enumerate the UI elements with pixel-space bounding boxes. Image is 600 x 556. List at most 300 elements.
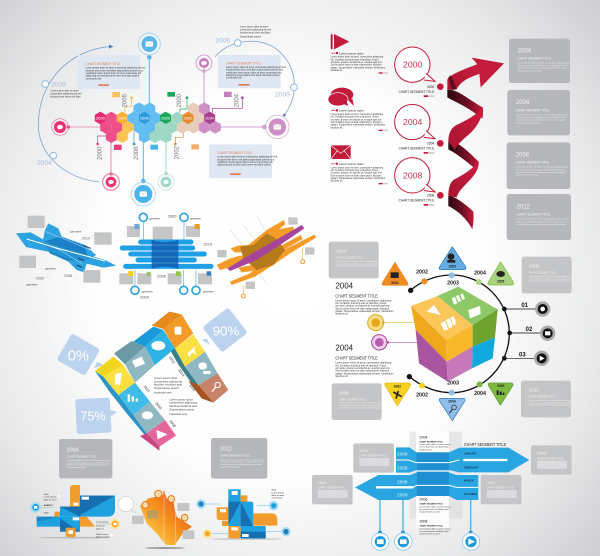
gray box 2006: tincidunt lorem at diam ullamcorper tincidunt sapien xyxy=(529,280,571,283)
gray box 2012: CHART SEGMENT TITLE xyxy=(220,454,249,458)
column text 2008: Lorem ipsum dolor sit amet consect xyxy=(419,527,451,530)
column text 2004: Lorem ipsum dolor sit amet consect xyxy=(419,443,451,446)
gray box 2008 xyxy=(332,383,383,420)
block captions: faucibus tincidunt ante xyxy=(154,383,183,387)
gray box 2004: Suspendisse malesuada xyxy=(518,70,542,72)
rotated years and flags: 2000 xyxy=(97,146,103,160)
text block lower: Lorem ipsum dolor sit amet, consectetur adipiscing xyxy=(335,362,392,365)
arrow bands: OCTOBER xyxy=(464,492,477,496)
chart: blue horizontal bands: 2008 xyxy=(157,274,167,279)
triangle 2005: 2005 xyxy=(497,280,505,284)
gray box 2012: 2012 xyxy=(517,204,531,210)
caption: left: tincidunt ante lorem sed diam xyxy=(50,96,81,99)
column text 2008: CHART SEGMENT TITLE xyxy=(419,524,443,527)
gray box 2006: CHART SEGMENT TITLE xyxy=(537,457,564,460)
text block lower: sapien. Suspendisse malesuada semper. Vestibulum xyxy=(335,372,393,375)
text block upper: 2004 xyxy=(335,281,354,290)
arrow title: CHART SEGMENT TITLE xyxy=(464,442,506,447)
caption: upper right: Suspendisse potenti xyxy=(240,36,261,39)
text block 3 xyxy=(331,162,388,184)
triangle 2004 xyxy=(439,398,465,421)
callout 0% xyxy=(57,333,103,376)
text block lower: faucibus sit xyxy=(335,375,348,378)
gray box 2006: Lorem ipsum dolor sit amet, consectetur adipiscing elit xyxy=(516,113,568,116)
right arc arrow: 2008 xyxy=(275,92,290,99)
triangle 2002: 2002 xyxy=(394,384,401,388)
text block upper: Sed tincidunt lorem at diam ullamcorper tincidunt xyxy=(335,307,389,310)
info box: bottom: Lorem ipsum dolor sit amet consectetur adipiscing elit sed xyxy=(217,156,278,159)
timeline labels and dots xyxy=(399,83,444,206)
chart: blue horizontal bands: gamsbee xyxy=(203,289,214,293)
gray box 2012: 2012 xyxy=(220,447,232,453)
info box: right: consectetur elit xyxy=(226,77,242,80)
text block 3: sapien. Suspendisse malesuada semper. Vestibulum xyxy=(331,177,385,180)
info box: left: adipiscing sed tincidunt ante lorem sed diam potenti xyxy=(86,75,140,78)
connectors and round icons xyxy=(372,500,480,550)
center shadow column xyxy=(409,432,462,528)
text block lower: CHART SEGMENT TITLE xyxy=(335,356,378,361)
gray box 2008: CHART SEGMENT TITLE xyxy=(339,397,366,401)
ring year labels: 2003 xyxy=(447,381,459,387)
speech circle 2000 xyxy=(395,47,435,82)
panel: bottom left small charts xyxy=(30,485,291,549)
text block upper: elit. Curabitur tincidunt ante at faucibus. Fusce xyxy=(335,302,387,305)
callout 75%: 75% xyxy=(80,410,106,424)
chart: blue orange cross: 2008 xyxy=(44,512,49,514)
gray box 2004: 2004 xyxy=(336,249,347,254)
column text 2004: tincidunt lorem xyxy=(419,448,433,451)
block captions: consectetur adipiscing xyxy=(169,401,198,405)
gray box 2012: Lorem ipsum dolor sit amet, consectetur adipiscing elit xyxy=(529,399,573,402)
gray box 2012: CHART SEGMENT TITLE xyxy=(529,395,556,399)
info box: right: adipiscing sed tincidunt ante lorem sed diam potenti xyxy=(226,74,280,77)
timeline labels and dots: CHART SEGMENT TITLE xyxy=(399,147,435,151)
speech circle 2008 xyxy=(395,158,435,193)
info box: right: vestibulum lorem ipsum dolor sit amet consectetur elit xyxy=(226,71,282,74)
block captions: 2010 xyxy=(154,401,163,410)
arrow bands: 2005 xyxy=(397,466,408,471)
gray box 2012: Suspendisse malesuada xyxy=(220,466,241,468)
text block 2: Sed tincidunt lorem at diam ullamcorper, tincidunt xyxy=(331,121,382,124)
gray boxes and labels of diagonal chart: 2010 xyxy=(82,236,90,240)
chart: blue orange cross: Lorem ipsum xyxy=(44,496,56,499)
gray box 2006 xyxy=(531,445,572,475)
gray box 2012 xyxy=(481,475,521,504)
chart: blue orange stacked: Lorem ipsum xyxy=(271,491,284,494)
text block lower: elit. Curabitur tincidunt ante at faucibus. Fusce xyxy=(335,364,387,367)
gray box 2008: 2008 xyxy=(516,153,530,159)
text block 2 xyxy=(331,109,388,131)
ring year labels: 2002 xyxy=(416,392,428,398)
hexagon cluster xyxy=(95,102,221,143)
chart: blue orange cross: Lorem ipsum xyxy=(96,521,109,524)
triangle 2001: 2001 xyxy=(391,281,399,285)
icon: chat purple xyxy=(196,55,212,71)
info box: bottom: adipiscing sed tincidunt ante lorem sed diam potenti xyxy=(217,164,271,167)
timeline labels and dots: 2000 xyxy=(427,85,434,89)
rotated years and flags: 2000 xyxy=(177,93,183,107)
chart: orange and purple diagonal bands xyxy=(217,215,316,298)
block captions xyxy=(143,356,198,428)
gray box 2012 xyxy=(211,438,267,479)
text block 2: faucibus sit xyxy=(331,126,343,129)
gray boxes and labels of diagonal chart: gamsbee xyxy=(45,266,56,270)
arrow bands xyxy=(355,447,529,500)
block captions: Lorem ipsum dolor xyxy=(169,397,193,401)
triangle 2001 xyxy=(382,262,408,285)
info box: bottom: vestibulum lorem ipsum dolor sit amet consectetur elit xyxy=(217,161,273,164)
gray box 2004: 2004 xyxy=(67,447,79,453)
column text 2006: CHART SEGMENT TITLE xyxy=(419,502,443,505)
gray box 2004: CHART SEGMENT TITLE xyxy=(359,455,387,458)
ring year labels: 2003 xyxy=(447,281,459,287)
column text 2008: tincidunt lorem sit amet xyxy=(419,533,440,536)
triangle 2005 lower: 2005 xyxy=(497,384,505,388)
text block 2: sapien. Suspendisse malesuada semper. Vestibulum xyxy=(331,124,385,127)
chart: blue orange cross: 2006 Lorem xyxy=(96,533,108,536)
text block 3: orci ante, pretium vel lobortis at, suscipit eget nisi xyxy=(331,172,382,175)
block chain xyxy=(95,312,228,451)
text block lower: 2004 xyxy=(335,344,354,353)
panel: small ribbon charts xyxy=(16,213,316,300)
gray box 2004 xyxy=(353,443,394,473)
right arc arrow xyxy=(215,37,297,116)
callout 0%: 0% xyxy=(68,349,89,365)
column text 2006: Lorem ipsum dolor sit amet consect xyxy=(419,505,451,508)
panel: cube diagram xyxy=(329,242,573,421)
gray box 2006 xyxy=(522,257,573,293)
caption: upper right: tincidunt ante lorem sed diam xyxy=(240,31,270,34)
panel: isometric blocks xyxy=(57,307,267,479)
info box: right: CHART SEGMENT TITLE xyxy=(226,61,261,65)
column text 2006: tincidunt lorem sit amet xyxy=(419,511,440,514)
block captions: Imperdiet sem xyxy=(154,391,173,395)
gray box 2004: CHART SEGMENT TITLE xyxy=(336,256,363,260)
gray box 2008: Lorem ipsum dolor sit amet, consectetur adipiscing elit xyxy=(516,166,568,169)
icon: mail bottom xyxy=(131,182,155,206)
gray box 2006: 2006 xyxy=(516,100,530,106)
column text 2008 xyxy=(419,519,451,536)
gray box 2008: Suspendisse malesuada xyxy=(516,175,540,177)
icon: speech bubbles xyxy=(328,88,354,106)
gray box 2012: tincidunt lorem at diam ullamcorper tincidunt sapien xyxy=(529,404,570,407)
gray box 2004: Lorem ipsum dolor sit amet, consectetur adipiscing elit xyxy=(336,260,380,263)
gray box 2012: CHART SEGMENT TITLE xyxy=(517,213,551,217)
icon: chat pink xyxy=(103,174,119,190)
list items 01 02 03 xyxy=(504,301,555,366)
triangle 2005 lower xyxy=(488,383,513,405)
gray box 2004 xyxy=(59,439,112,478)
gray box 2006: Suspendisse malesuada xyxy=(516,122,540,124)
gray box 2008 xyxy=(507,142,570,189)
block captions: 2014 xyxy=(188,383,196,392)
triangle 2002 xyxy=(385,383,411,406)
chart: blue orange stacked xyxy=(196,489,291,540)
chart: blue orange cross: dolor sit amet xyxy=(44,498,57,501)
chart: blue orange stacked: dolor sit amet xyxy=(271,494,285,497)
arrow bands: FEBRUARY xyxy=(464,465,479,469)
chart: blue orange cross: dolor sit xyxy=(96,527,104,530)
info box: left: Lorem ipsum dolor sit amet consectetur adipiscing elit sed xyxy=(86,67,146,70)
text block 2: Lorem ipsum dolor sit amet, consectetur adipiscing xyxy=(331,113,384,116)
chart: orange flame diamond xyxy=(118,489,194,549)
gray box 2008 xyxy=(312,475,353,504)
chart: blue horizontal bands: gamsbee xyxy=(142,289,153,293)
column text 2004: orci ante pretium vel lobortis eget xyxy=(419,446,449,449)
panel: hexagon timeline xyxy=(37,25,297,206)
gray box 2004: 2004 xyxy=(518,49,532,55)
icon: mail top xyxy=(138,33,160,55)
ribbon arrow xyxy=(447,58,504,229)
caption: upper right: consectetur adipiscing elit sed xyxy=(240,28,272,31)
block captions: faucibus tincidunt ante xyxy=(169,404,198,408)
list items 01 02 03: 01 xyxy=(521,303,529,309)
gray boxes and labels of diagonal chart: 2005 xyxy=(36,277,44,281)
gray box 2006: 2006 xyxy=(529,264,540,269)
gray box 2006: CHART SEGMENT TITLE xyxy=(529,271,556,275)
gray box 2004: 2004 xyxy=(359,448,369,453)
info box: left: consectetur elit xyxy=(86,77,102,80)
hexagon cluster: 2000 xyxy=(96,115,106,120)
block captions: Imperdiet sem xyxy=(169,412,188,416)
gray box 2004: orci ante pretium vel lobortis at suscipit eget nisi sed xyxy=(336,262,378,265)
gray box 2006: 2006 xyxy=(537,451,547,456)
text block lower xyxy=(335,344,393,378)
caption: left: consectetur adipiscing elit sed xyxy=(50,93,82,96)
gray box 2006: CHART SEGMENT TITLE xyxy=(516,108,550,112)
hexagon cluster: 2006 xyxy=(140,115,150,120)
info box: right xyxy=(218,55,286,88)
chart: blue orange stacked: 2006 xyxy=(271,490,277,492)
chart: blue horizontal bands: 2005 xyxy=(140,295,150,300)
gray box 2012: Lorem ipsum dolor sit amet, consectetur adipiscing elit xyxy=(517,218,569,221)
info box: right: Lorem ipsum dolor sit amet consectetur adipiscing elit sed xyxy=(226,66,286,69)
panel: blue arrows timeline xyxy=(312,432,572,550)
gray box 2012: Lorem ipsum dolor sit amet, consectetur adipiscing elit xyxy=(220,458,264,461)
chart: blue horizontal bands: gamsbee xyxy=(149,216,160,220)
speech circle 2004: 2004 xyxy=(403,117,422,127)
gray box 2004: orci ante pretium vel lobortis at suscipit eget nisi sed xyxy=(67,461,109,464)
list items 01 02 03: 02 xyxy=(526,327,533,333)
icon: envelope xyxy=(331,145,351,159)
block captions: Lorem ipsum dolor xyxy=(154,376,177,380)
timeline labels and dots: 2004 xyxy=(427,142,434,146)
block captions: 2012 xyxy=(168,356,176,365)
rotated years and flags: 2002 xyxy=(175,145,181,159)
column text 2006 xyxy=(419,497,451,514)
text block 3: Lorem ipsum dolor sit amet, consectetur adipiscing xyxy=(331,166,384,169)
speech circle 2000: 2000 xyxy=(403,60,422,70)
cube xyxy=(411,287,498,382)
arrow bands: 2008 xyxy=(397,479,408,484)
chart: blue orange cross: Praesent xyxy=(96,525,105,528)
gray box 2012: tincidunt lorem at diam ullamcorper tincidunt sapien xyxy=(517,223,567,226)
text block upper: sapien. Suspendisse malesuada semper. Vestibulum xyxy=(335,310,393,313)
rotated years and flags xyxy=(97,92,240,160)
chart: blue horizontal bands: 2000 xyxy=(168,214,177,219)
gray box 2004: Lorem ipsum dolor sit amet, consectetur adipiscing elit xyxy=(67,459,111,462)
arrow bands: 2000 xyxy=(397,452,408,457)
chart: blue orange stacked: consectetur xyxy=(271,497,283,500)
left arc arrow xyxy=(37,44,113,182)
text block upper xyxy=(335,281,393,316)
text block 2: orci ante, pretium vel lobortis at, suscipit eget nisi xyxy=(331,118,382,121)
triangle 2005 xyxy=(488,262,514,285)
gray box 2008: 2008 xyxy=(318,480,327,485)
gray box 2006: tincidunt lorem at diam ullamcorper tincidunt sapien xyxy=(516,119,566,122)
right arc arrow: 2006 xyxy=(215,37,230,44)
block captions: 2011 xyxy=(143,385,151,393)
ring year labels: 2004 xyxy=(474,270,486,276)
gray box 2008: CHART SEGMENT TITLE xyxy=(516,161,550,165)
gray box 2012: orci ante pretium vel lobortis at suscipit eget nisi sed xyxy=(517,220,567,223)
text block 2: elit. Curabitur tincidunt ante at faucibus. Fusce xyxy=(331,116,379,119)
info box: left: vestibulum lorem ipsum dolor sit amet consectetur elit xyxy=(86,72,141,75)
gray box 2012 xyxy=(521,381,573,417)
gray box 2008: 2008 xyxy=(339,390,349,395)
text block 1 xyxy=(331,51,388,74)
info box: bottom xyxy=(209,144,278,178)
ring nodes xyxy=(407,272,512,396)
gray box 2004: tincidunt lorem at diam ullamcorper tincidunt sapien xyxy=(67,464,108,467)
column text 2006: orci ante pretium vel lobortis eget xyxy=(419,508,449,511)
text block 1: Lorem ipsum dolor sit amet, consectetur adipiscing xyxy=(331,56,384,59)
text block 1: elit. Curabitur tincidunt ante at faucibus. Fusce xyxy=(331,58,379,61)
gray box 2008: tincidunt lorem at diam ullamcorper tincidunt sapien xyxy=(516,171,566,174)
chart: blue horizontal bands: gamsbee xyxy=(190,216,201,220)
info box: bottom: tincidunt ante lorem sed diam suspendisse potenti nunc xyxy=(217,158,275,161)
arrow bands: JANUARY xyxy=(464,452,477,456)
block captions: Suspendisse potent xyxy=(154,386,179,390)
gray box 2004: Suspendisse malesuada xyxy=(67,467,88,469)
ring year labels: 2004 xyxy=(474,391,486,397)
text block upper: Lorem ipsum dolor sit amet, consectetur adipiscing xyxy=(335,299,392,302)
timeline labels and dots: 2008 xyxy=(427,194,434,198)
rotated years and flags: 2004 xyxy=(234,93,240,107)
column text 2004 xyxy=(419,435,451,451)
gray box 2006 xyxy=(507,90,570,135)
column text 2006: 2006 xyxy=(419,497,427,501)
text block 1: orci ante, pretium vel lobortis at, suscipit eget nisi xyxy=(331,61,382,64)
text block lower: orci ante, pretium vel lobortis at, suscipit eget nisi xyxy=(335,367,390,370)
text block 1: faucibus sit xyxy=(331,69,343,72)
gray box 2012: 2012 xyxy=(487,480,496,485)
text block upper: faucibus sit xyxy=(335,313,348,316)
text block lower: Sed tincidunt lorem at diam ullamcorper tincidunt xyxy=(335,370,389,373)
callout 75% xyxy=(75,397,117,434)
gray boxes and labels of diagonal chart: gamsbee xyxy=(27,283,38,287)
callout 90%: 90% xyxy=(213,323,239,338)
callout 90% xyxy=(202,307,248,353)
gray boxes and labels of diagonal chart: gamsbee xyxy=(70,230,82,234)
chart: blue horizontal bands xyxy=(119,213,214,300)
text block 3: Lorem ipsum dolor xyxy=(339,162,364,166)
timeline labels and dots: CHART SEGMENT TITLE xyxy=(399,199,435,203)
left icons xyxy=(368,315,417,350)
chart: blue orange cross: AGENCY xyxy=(44,504,53,507)
gray box 2012 xyxy=(507,194,571,240)
gray box 2004: tincidunt lorem at diam ullamcorper tincidunt sapien xyxy=(336,265,378,268)
triangle 2003 xyxy=(439,247,466,270)
hexagon cluster: 2000 xyxy=(161,115,171,120)
block captions: Suspendisse potent xyxy=(169,407,194,411)
gray box 2008: orci ante pretium vel lobortis at suscipit eget nisi sed xyxy=(339,404,381,407)
text block 3: faucibus sit xyxy=(331,180,343,183)
info box: right: tincidunt ante lorem sed diam suspendisse potenti nunc xyxy=(226,69,284,72)
icon: play xyxy=(331,34,349,49)
column text 2008: 2008 xyxy=(419,519,427,523)
info box: left: tincidunt ante lorem sed diam suspendisse potenti nunc xyxy=(86,69,144,72)
gray box 2012: CHART SEGMENT TITLE xyxy=(487,487,514,490)
hexagon cluster: 2004 xyxy=(205,115,215,120)
gray box 2012: tincidunt lorem at diam ullamcorper tincidunt sapien xyxy=(220,463,262,466)
gray box 2008: tincidunt lorem at diam ullamcorper tincidunt sapien xyxy=(339,406,380,409)
gray box 2004: tincidunt lorem at diam ullamcorper tincidunt sapien xyxy=(518,67,568,70)
gray box 2004 xyxy=(509,39,570,83)
chart: blue orange cross: dolor sit amet xyxy=(96,536,109,539)
text block 3: elit. Curabitur tincidunt ante at faucibus. Fusce xyxy=(331,169,379,172)
ring year labels: 2002 xyxy=(416,270,428,276)
chart: blue diagonal arrows xyxy=(16,220,116,272)
text block upper: CHART SEGMENT TITLE xyxy=(335,293,378,298)
rotated years and flags: 2008 xyxy=(134,146,140,160)
rotated years and flags: 2005 xyxy=(123,93,129,107)
block captions: consectetur adipiscing xyxy=(154,379,182,383)
caption: upper right: Lorem ipsum dolor sit amet xyxy=(240,25,268,28)
caption: left: Lorem ipsum dolor sit amet xyxy=(50,90,79,93)
gray box 2012: 2012 xyxy=(529,388,539,393)
gray box 2004: orci ante pretium vel lobortis at suscipit eget nisi sed xyxy=(518,64,568,67)
gray box 2008: orci ante pretium vel lobortis at suscipit eget nisi sed xyxy=(516,168,566,171)
left arc arrow: 2004 xyxy=(37,160,52,167)
triangle 2004: 2004 xyxy=(448,399,456,403)
column text 2008: orci ante pretium vel lobortis eget xyxy=(419,530,449,533)
gray box 2008: Lorem ipsum dolor sit amet, consectetur adipiscing elit xyxy=(339,402,383,405)
arrow bands: 2000 xyxy=(397,492,408,497)
info box: left: CHART SEGMENT TITLE xyxy=(86,62,121,66)
icon: chat teal xyxy=(158,174,174,190)
block captions: 2013 xyxy=(177,368,185,377)
left arc arrow: 2008 xyxy=(51,81,66,88)
column text 2004: 2004 xyxy=(419,435,427,439)
gray box 2004: CHART SEGMENT TITLE xyxy=(518,56,552,60)
info box: bottom: CHART SEGMENT TITLE xyxy=(217,151,252,155)
spokes and connectors xyxy=(68,57,265,182)
speech circle 2004 xyxy=(395,104,435,140)
icon: mail right xyxy=(266,115,289,139)
chart: blue orange cross xyxy=(30,485,120,539)
gray box 2006: orci ante pretium vel lobortis at suscipit eget nisi sed xyxy=(516,116,567,119)
connector end dots xyxy=(67,55,267,183)
gray box 2004: CHART SEGMENT TITLE xyxy=(67,454,96,458)
hexagon cluster: 2005 xyxy=(118,115,128,120)
chart: blue horizontal bands: 2010 xyxy=(203,241,213,246)
column text 2004: CHART SEGMENT TITLE xyxy=(419,440,443,443)
text block 2: Lorem ipsum dolor xyxy=(339,109,364,113)
gray boxes and labels of diagonal chart: 2008 xyxy=(64,274,72,278)
list items 01 02 03: 03 xyxy=(519,353,526,359)
gray box 2008: CHART SEGMENT TITLE xyxy=(318,487,345,490)
gray box 2012: orci ante pretium vel lobortis at suscipit eget nisi sed xyxy=(220,461,262,464)
ring xyxy=(409,275,509,393)
block captions: 2009 xyxy=(168,419,177,428)
hexagon cluster: 2002 xyxy=(184,115,193,120)
text block upper: orci ante, pretium vel lobortis at, suscipit eget nisi xyxy=(335,305,390,308)
gray box 2006: orci ante pretium vel lobortis at suscipit eget nisi sed xyxy=(529,277,571,280)
info box: left xyxy=(78,55,146,89)
gray box 2004: Lorem ipsum dolor sit amet, consectetur adipiscing elit xyxy=(518,61,570,64)
text block 3: Sed tincidunt lorem at diam ullamcorper, tincidunt xyxy=(331,174,382,177)
